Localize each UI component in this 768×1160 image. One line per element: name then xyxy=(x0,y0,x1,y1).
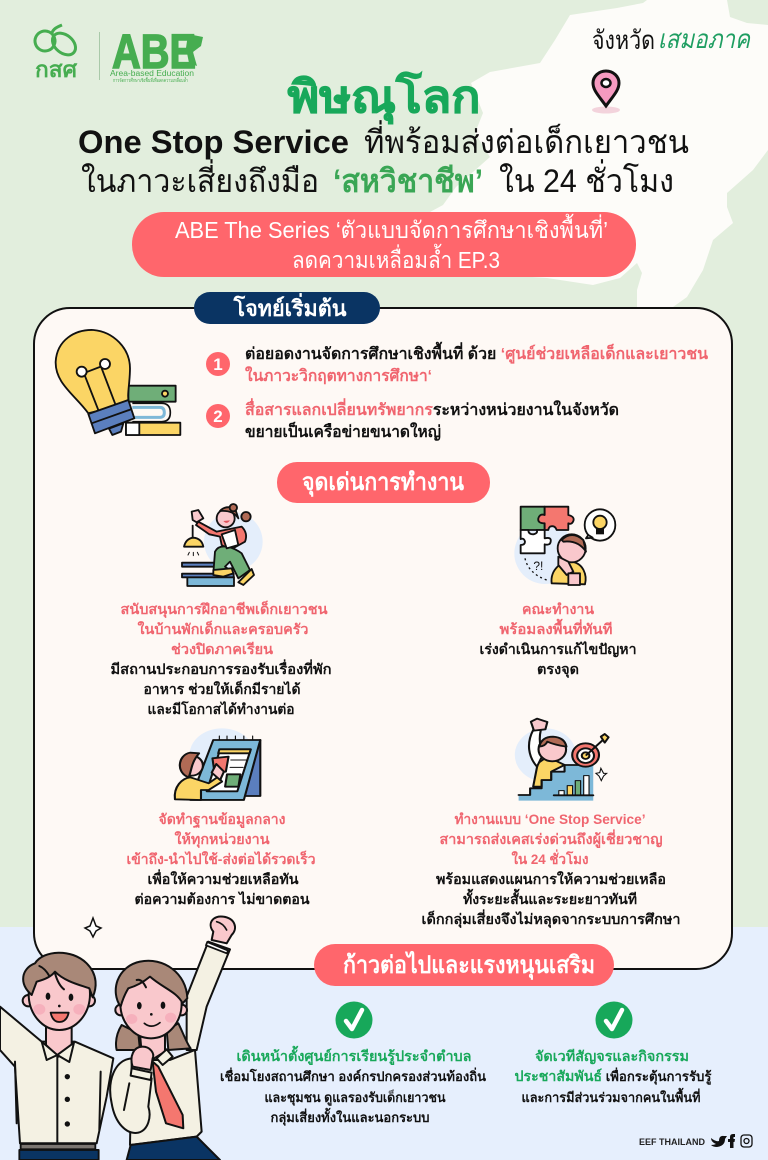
icon: person reaching target xyxy=(515,719,609,801)
woman's front arm xyxy=(110,1058,152,1133)
tagline: equal province: จังหวัด xyxy=(592,25,655,55)
next step 1 text: และชุมชน ดูแลรองรับเด็กเยาวชน xyxy=(264,1088,446,1106)
next step 1 text xyxy=(220,1045,486,1126)
highlight 2 text: คณะทำงาน xyxy=(522,601,594,617)
woman's pigtails xyxy=(116,1025,140,1050)
woman's head xyxy=(140,1033,165,1060)
title: province: พิษณุโลก xyxy=(288,70,480,125)
heading: starting challenge: โจทย์เริ่มต้น xyxy=(233,292,346,321)
highlight 3 text xyxy=(126,811,316,907)
next step 2 text: ประชาสัมพันธ์ เพื่อกระตุ้นการรับรู้ xyxy=(514,1067,712,1085)
icon: location pin xyxy=(592,71,620,114)
woman's tie xyxy=(153,1062,183,1128)
heading: next steps: ก้าวต่อไปและแรงหนุนเสริม xyxy=(343,950,595,981)
highlight 1 text: ช่วงปิดภาคเรียน xyxy=(171,641,273,657)
next step 2 text: และการมีส่วนร่วมจากคนในพื้นที่ xyxy=(522,1087,700,1105)
point 2: 2 xyxy=(213,407,223,426)
point 2: สื่อสารแลกเปลี่ยนทรัพยากรระหว่างหน่วยงานในจังหวัด xyxy=(245,398,619,419)
title line 2: ใน 24 ชั่วโมง xyxy=(499,159,674,199)
main content panel xyxy=(34,308,732,969)
logo: EEF leaf mark and name: กสศ xyxy=(35,57,78,82)
title line 1 xyxy=(78,120,689,160)
icon: thinking boy with puzzle xyxy=(514,507,615,585)
highlight 4 text: ใน 24 ชั่วโมง xyxy=(512,849,589,867)
series banner: ลดความเหลื่อมล้ำ EP.3 xyxy=(292,244,500,273)
next step 2 text: จัดเวทีสัญจรและกิจกรรม xyxy=(535,1048,689,1065)
title line 2: ‘สหวิชาชีพ’ xyxy=(333,163,483,199)
point 1: ในภาวะวิกฤตทางการศึกษา‘ xyxy=(245,366,432,385)
point 2 xyxy=(206,398,619,442)
highlight 2 text: พร้อมลงพื้นที่ทันที xyxy=(500,618,612,637)
logo: ABE area-based education: ABE xyxy=(112,26,196,79)
series banner xyxy=(132,212,636,277)
title line 1: One Stop Service xyxy=(78,124,349,160)
heading: starting challenge xyxy=(194,292,380,324)
highlight 1 text: ในบ้านพักเด็กและครอบครัว xyxy=(138,620,309,637)
highlight 4 text xyxy=(422,811,680,928)
man's shirt xyxy=(0,1007,113,1143)
point 1 xyxy=(206,341,708,385)
highlight 4 text: ทั้งระยะสั้นและระยะยาวทันที xyxy=(463,888,637,907)
icon: green check 1 xyxy=(336,1002,372,1038)
icon: instagram xyxy=(741,1135,752,1147)
highlight 1 text: มีสถานประกอบการรองรับเรื่องที่พัก xyxy=(110,659,332,677)
highlight 3 text: ให้ทุกหน่วยงาน xyxy=(174,830,270,848)
footer: EEF Thailand: EEF THAILAND xyxy=(639,1137,705,1147)
highlight 1 text xyxy=(110,600,332,717)
icon: sparkle xyxy=(85,918,101,937)
highlight 4 text: พร้อมแสดงแผนการให้ความช่วยเหลือ xyxy=(436,870,666,887)
highlight 3 text: ต่อความต้องการ ไม่ขาดตอน xyxy=(134,890,310,907)
highlight 3 text: เพื่อให้ความช่วยเหลือทัน xyxy=(148,869,299,887)
heading: next steps xyxy=(314,944,614,986)
icon: person at data calendar xyxy=(175,728,260,800)
next step 1 text: เชื่อมโยงสถานศึกษา องค์กรปกครองส่วนท้องถิ่น xyxy=(220,1067,486,1084)
highlight 4 text: ทำงานแบบ ‘One Stop Service’ xyxy=(454,811,646,827)
highlight 1 text: และมีโอกาสได้ทำงานต่อ xyxy=(148,700,294,717)
woman's raised arm xyxy=(187,942,230,1050)
highlight 1 text: อาหาร ช่วยให้เด็กมีรายได้ xyxy=(144,680,300,697)
next step 1 text: เดินหน้าตั้งศูนย์การเรียนรู้ประจำตำบล xyxy=(236,1045,472,1065)
highlight 1 text: สนับสนุนการฝึกอาชีพเด็กเยาวชน xyxy=(120,600,328,618)
next step 1 text: กลุ่มเสี่ยงทั้งในและนอกระบบ xyxy=(270,1107,430,1126)
woman's collar xyxy=(157,1049,173,1065)
point 1: 1 xyxy=(213,355,223,374)
highlight 2 text: เร่งดำเนินการแก้ไขปัญหา xyxy=(480,640,636,658)
logo divider xyxy=(99,32,100,80)
icon: twitter xyxy=(711,1136,727,1147)
icon: thinking boy with puzzle: ?! xyxy=(533,559,543,573)
icon: light bulb and books xyxy=(56,330,180,435)
heading: highlights: จุดเด่นการทำงาน xyxy=(302,469,465,498)
title line 1: ที่พร้อมส่งต่อเด็กเยาวชน xyxy=(364,120,689,160)
highlight 3 text: จัดทำฐานข้อมูลกลาง xyxy=(158,811,286,829)
highlight 2 text: ตรงจุด xyxy=(537,661,579,678)
title line 2 xyxy=(81,159,674,199)
woman's torso xyxy=(130,1050,202,1145)
background: upper green xyxy=(0,0,768,927)
point 2: ขยายเป็นเครือข่ายขนาดใหญ่ xyxy=(245,420,441,442)
highlight 4 text: เด็กกลุ่มเสี่ยงจึงไม่หลุดจากระบบการศึกษา xyxy=(422,909,680,928)
highlight 3 text: เข้าถึง-นำไปใช้-ส่งต่อได้รวดเร็ว xyxy=(126,850,316,867)
point 1: ต่อยอดงานจัดการศึกษาเชิงพื้นที่ ด้วย ‘ศูนย์ช่วยเหลือเด็กและเยาวชน xyxy=(245,341,708,365)
logo: ABE area-based education: Area-based Education xyxy=(110,69,194,78)
title line 2: ในภาวะเสี่ยงถึงมือ xyxy=(81,159,319,199)
logo: ABE area-based education: การจัดการศึกษาเชิงพื้นที่เพื่อลดความเหลื่อมล้ำ xyxy=(113,75,188,84)
background: white province map xyxy=(430,0,768,307)
series banner: ABE The Series ‘ตัวแบบจัดการศึกษาเชิงพื้นที่’ xyxy=(175,214,608,243)
man's head xyxy=(23,995,34,1006)
icon: facebook xyxy=(728,1134,735,1148)
tagline: equal province: เสมอภาค xyxy=(658,24,751,54)
highlight 4 text: สามารถส่งเคสเร่งด่วนถึงผู้เชี่ยวชาญ xyxy=(440,829,663,848)
man's neck xyxy=(46,1027,72,1057)
illustration: two cheering students xyxy=(0,916,235,1160)
heading: highlights xyxy=(277,462,490,503)
icon: girl with lamp on books xyxy=(182,504,263,586)
icon: green check 2 xyxy=(596,1002,632,1038)
next step 2 text xyxy=(514,1048,712,1105)
background: lower blue xyxy=(0,927,768,1160)
logo: EEF leaf mark and name xyxy=(32,25,80,82)
man's trousers xyxy=(19,1150,99,1160)
tagline: equal province xyxy=(592,24,751,55)
highlight 2 text xyxy=(480,601,636,678)
